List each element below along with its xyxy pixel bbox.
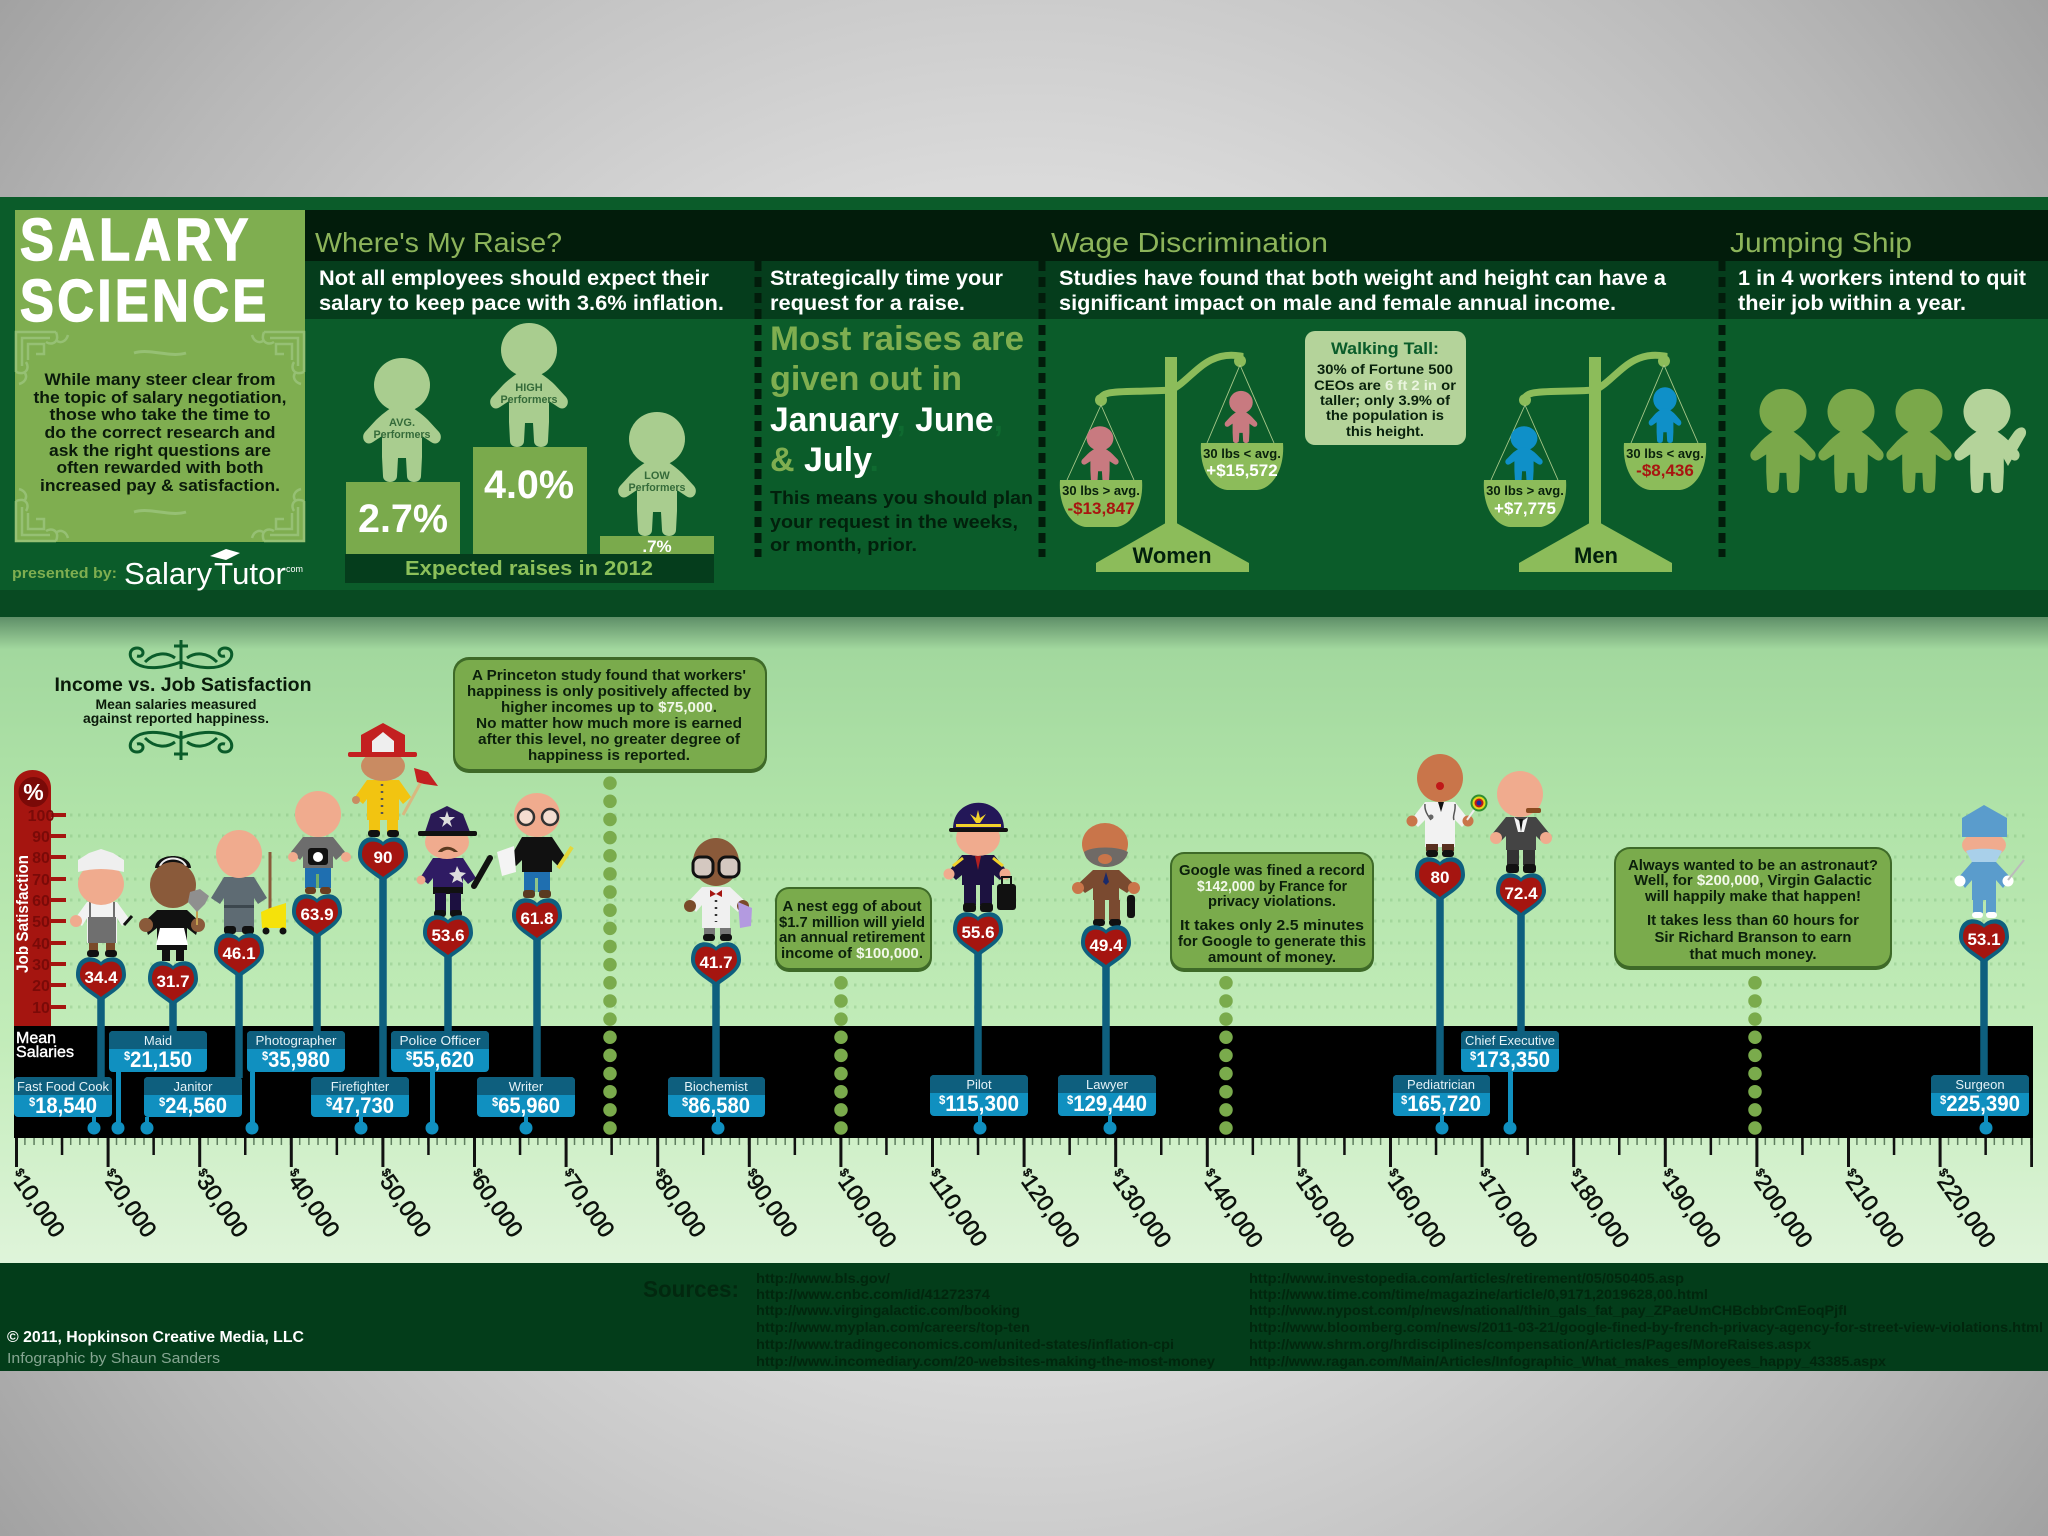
text: jumping intro: 1 in 4 workers intend to quit — [1738, 267, 2026, 290]
character: surgeon — [1954, 805, 2024, 918]
salary position pins — [88, 1072, 1992, 1134]
text: sources: http://www.investopedia.com/articles/retirement/05/050405.asp — [1249, 1270, 1684, 1286]
axis: job satisfaction: 40 — [32, 936, 50, 953]
callout: google fine: Google was fined a record — [1179, 862, 1365, 879]
hearts: satisfaction values: 53.6 — [431, 926, 465, 945]
axis: salary labels: 50,000 — [375, 1169, 437, 1242]
text: sources: http://www.time.com/time/magazine/article/0,9171,2019628,00.html — [1249, 1286, 1708, 1302]
heading: income vs job satisfaction — [54, 640, 312, 760]
callout: nest egg: income of $100,000. — [781, 945, 923, 962]
intro text: ask the right questions are — [49, 442, 271, 460]
text: copyright: © 2011, Hopkinson Creative Media, LLC — [7, 1329, 304, 1346]
axis: salary labels: $ — [1753, 1166, 1768, 1179]
text: raise intro: salary to keep pace with 3.6% inflation. — [319, 292, 724, 315]
hearts: satisfaction values: 55.6 — [961, 923, 995, 942]
hearts: satisfaction values: 61.8 — [520, 909, 554, 928]
callout: nest egg: $1.7 million will yield — [779, 914, 925, 931]
figure: thinner man — [1649, 387, 1681, 443]
axis: salary labels: 10,000 — [9, 1169, 70, 1242]
axis: salary labels: 220,000 — [1932, 1169, 2001, 1252]
axis: salary labels: 190,000 — [1658, 1169, 1727, 1252]
callout: walking tall: taller; only 3.9% of — [1320, 392, 1450, 408]
axis: job satisfaction: % — [23, 779, 44, 805]
tag: pilot: $ — [939, 1093, 946, 1107]
character: writer — [497, 793, 572, 898]
percent values: 2.7% — [358, 497, 448, 541]
chart: men scale — [1484, 355, 1706, 572]
tag: surgeon: $ — [1940, 1093, 1946, 1107]
performer labels: HIGH — [515, 382, 543, 394]
axis: salary labels: $ — [1478, 1166, 1493, 1179]
character: fast food cook — [70, 849, 132, 957]
tag: janitor: Janitor — [173, 1079, 213, 1094]
tag: photographer: Photographer — [256, 1033, 337, 1048]
presented by logo: Tutor — [214, 556, 286, 591]
text: sources: http://www.incomediary.com/20-websites-making-the-most-money — [756, 1353, 1215, 1369]
callout: google fine: privacy violations. — [1208, 893, 1336, 910]
axis: salary labels: 70,000 — [558, 1169, 620, 1242]
callout: walking tall: the population is — [1326, 407, 1444, 423]
callout: google fine: for Google to generate this — [1178, 933, 1366, 950]
axis: job satisfaction: 70 — [32, 872, 50, 889]
callout: princeton study: A Princeton study found that workers' — [472, 667, 746, 684]
tag: lawyer — [1058, 1075, 1156, 1116]
axis: salary labels: 30,000 — [192, 1169, 254, 1242]
pans — [1484, 480, 1566, 527]
heading: wage discrimination: Wage Discrimination — [1051, 227, 1328, 258]
axis: salary labels: 170,000 — [1474, 1169, 1543, 1252]
panel: title block — [15, 206, 305, 542]
axis: salary labels: 120,000 — [1016, 1169, 1085, 1252]
chart: women scale: -$13,847 — [1067, 499, 1135, 518]
icons: four workers — [1750, 389, 2026, 493]
tag: writer — [477, 1077, 575, 1118]
women label: Women — [1132, 543, 1212, 568]
icon: low performer — [618, 412, 696, 536]
tag: pediatrician: Pediatrician — [1407, 1077, 1475, 1092]
text: wage intro: significant impact on male and female annual income. — [1059, 292, 1616, 315]
performer labels: Performers — [628, 482, 686, 494]
tag: firefighter: 47,730 — [332, 1093, 394, 1118]
heading: jumping ship: Jumping Ship — [1730, 227, 1912, 258]
callout: princeton study: higher incomes up to $75,000. — [501, 699, 717, 716]
callout: virgin galactic: will happily make that happen! — [1644, 888, 1861, 905]
text: timing panel: Strategically time your — [770, 267, 1003, 290]
character: janitor — [211, 830, 286, 934]
performer labels: LOW — [644, 470, 670, 482]
heading: income vs job satisfaction: Income vs. Job Satisfaction — [54, 675, 312, 696]
character: chief executive — [1490, 771, 1552, 873]
text: sources: http://www.shrm.org/hrdisciplines/compensation/Articles/Pages/MoreRaises.aspx — [1249, 1336, 1811, 1352]
text: sources: http://www.ragan.com/Main/Articles/Infographic_What_makes_employees_happy_43385.aspx — [1249, 1353, 1886, 1369]
axis: salary labels: $ — [928, 1166, 944, 1179]
axis: job satisfaction: 20 — [32, 978, 50, 995]
tag: maid: 21,150 — [130, 1047, 192, 1072]
axis: salary labels: $ — [745, 1166, 761, 1179]
chart: men scale: +$7,775 — [1494, 499, 1556, 518]
presented by logo — [12, 549, 303, 591]
axis: job satisfaction — [13, 770, 66, 1026]
character: photographer — [288, 791, 351, 894]
pan labels: 30 lbs > avg. — [1486, 483, 1564, 498]
character: pediatrician — [1406, 754, 1488, 857]
axis: salary ticks — [15, 1142, 2033, 1152]
character: lawyer — [1072, 823, 1140, 926]
text: wage intro — [1059, 267, 1666, 315]
axis: salary labels: 140,000 — [1200, 1169, 1269, 1252]
hearts: satisfaction values — [76, 837, 2009, 1006]
axis: salary labels: 20,000 — [100, 1169, 162, 1242]
percent values: .7% — [642, 537, 672, 556]
tag: maid: $ — [124, 1049, 130, 1063]
tag: firefighter: Firefighter — [331, 1079, 390, 1094]
tag: fast food cook: Fast Food Cook — [17, 1079, 109, 1094]
presented by logo: presented by: — [12, 565, 117, 582]
intro text: often rewarded with both — [56, 459, 264, 477]
tag: firefighter: $ — [326, 1095, 332, 1109]
heading: where's my raise: Where's My Raise? — [315, 227, 562, 258]
men label: Men — [1574, 543, 1618, 568]
title — [20, 206, 270, 334]
tag: janitor: $ — [159, 1095, 165, 1109]
hearts: satisfaction values: 41.7 — [699, 953, 733, 972]
callout: google fine: $142,000 by France for — [1197, 878, 1347, 895]
icon: high performer — [490, 323, 568, 447]
text: sources: http://www.bloomberg.com/news/2011-03-21/google-fined-by-french-privacy-agency-for-street-view-violations.html — [1249, 1319, 2043, 1335]
text: sources: http://www.nypost.com/p/news/national/thin_gals_fat_pay_ZPaeUmCHBcbbrCmEoqPjfI — [1249, 1302, 1847, 1318]
tag: writer: $ — [492, 1095, 498, 1109]
separators — [758, 261, 1722, 557]
callout: virgin galactic: It takes less than 60 hours for — [1647, 912, 1859, 929]
axis: salary labels — [5, 1164, 2001, 1252]
callout: nest egg: A nest egg of about — [782, 898, 922, 915]
tag: police officer: $ — [406, 1049, 412, 1063]
callout: nest egg — [775, 887, 932, 972]
axis: salary labels: 200,000 — [1749, 1169, 1818, 1252]
intro text: the topic of salary negotiation, — [34, 389, 286, 407]
text: timing panel: This means you should plan — [770, 488, 1033, 508]
text: wage intro: Studies have found that both weight and height can have a — [1059, 267, 1666, 290]
tag: biochemist: $ — [682, 1095, 688, 1109]
text: timing panel: or month, prior. — [770, 535, 917, 555]
callout: princeton study: after this level, no greater degree of — [478, 731, 741, 748]
text: raise intro — [319, 267, 724, 315]
axis: salary labels: $ — [1844, 1166, 1860, 1179]
pan labels: 30 lbs > avg. — [1062, 483, 1140, 498]
intro text: increased pay & satisfaction. — [40, 477, 280, 495]
axis: salary labels: 130,000 — [1108, 1169, 1177, 1252]
text: timing panel: Most raises are — [770, 320, 1024, 358]
callout: google fine: amount of money. — [1208, 949, 1336, 966]
axis: job satisfaction: 80 — [32, 850, 50, 867]
hearts: satisfaction values: 46.1 — [222, 944, 256, 963]
axis: salary labels: $ — [379, 1166, 394, 1179]
tag: writer: Writer — [509, 1079, 544, 1094]
bars — [346, 447, 714, 554]
tag: chief executive — [1461, 1031, 1559, 1072]
label: mean salaries: Mean — [16, 1030, 56, 1047]
tag: fast food cook — [14, 1077, 112, 1118]
text: sources: http://www.cnbc.com/id/41272374 — [756, 1286, 990, 1302]
callout: google fine — [1170, 852, 1374, 972]
performer labels: AVG. — [389, 417, 415, 429]
text: sources — [643, 1270, 2043, 1369]
tag: lawyer: 129,440 — [1073, 1091, 1147, 1116]
tag: janitor — [144, 1077, 242, 1118]
text: timing panel: your request in the weeks, — [770, 512, 1018, 532]
text: jumping intro — [1738, 267, 2026, 315]
percent values: 4.0% — [484, 463, 574, 507]
axis: job satisfaction: Job Satisfaction — [13, 855, 32, 973]
axis: salary labels: $ — [837, 1166, 852, 1179]
axis: salary labels: $ — [470, 1166, 486, 1179]
grid lines — [70, 815, 2030, 1007]
tag: pilot: Pilot — [966, 1077, 992, 1092]
tag: photographer: $ — [262, 1049, 268, 1063]
tag: pediatrician — [1393, 1075, 1490, 1116]
tag: police officer: Police Officer — [400, 1033, 481, 1048]
axis: job satisfaction: 10 — [32, 1000, 50, 1017]
title: SALARY — [20, 206, 252, 273]
panel: footer — [0, 1263, 2048, 1371]
tag: police officer — [391, 1031, 489, 1072]
text: sources: http://www.myplan.com/careers/top-ten — [756, 1319, 1030, 1335]
chart: men scale: -$8,436 — [1636, 461, 1694, 480]
tag: biochemist: 86,580 — [688, 1093, 750, 1118]
title: SCIENCE — [20, 267, 270, 334]
axis: job satisfaction: 60 — [32, 893, 50, 910]
callout: nest egg: an annual retirement — [779, 929, 925, 946]
axis: salary labels: 150,000 — [1291, 1169, 1360, 1252]
text: timing panel: given out in — [770, 360, 962, 398]
presented by logo: com — [286, 564, 303, 574]
hearts: satisfaction values: 63.9 — [300, 905, 334, 924]
performer labels: Performers — [500, 394, 558, 406]
text: jumping intro: their job within a year. — [1738, 292, 1966, 315]
figure: heavier man — [1505, 426, 1543, 482]
tag: chief executive: $ — [1470, 1049, 1476, 1063]
callout: virgin galactic: Well, for $200,000, Virgin Galactic — [1634, 872, 1872, 889]
tag: chief executive: Chief Executive — [1465, 1033, 1555, 1048]
tag: lawyer: $ — [1067, 1093, 1073, 1107]
intro text: While many steer clear from — [44, 371, 276, 389]
intro text — [34, 371, 286, 495]
callout: google fine: It takes only 2.5 minutes — [1180, 917, 1364, 934]
tag: photographer: 35,980 — [268, 1047, 330, 1072]
label: mean salaries — [16, 1030, 74, 1061]
tag: pilot: 115,300 — [945, 1091, 1019, 1116]
callout: walking tall: Walking Tall: — [1331, 339, 1439, 358]
axis: salary labels: 40,000 — [284, 1169, 345, 1242]
tag: biochemist: Biochemist — [684, 1079, 748, 1094]
text: timing panel: & July. — [770, 441, 879, 479]
tag: writer: 65,960 — [498, 1093, 560, 1118]
axis: salary labels: $ — [195, 1166, 211, 1179]
percent values — [358, 463, 672, 556]
label: mean salaries: Salaries — [16, 1044, 74, 1061]
tag: fast food cook: $ — [29, 1095, 35, 1109]
hearts: satisfaction values: 31.7 — [156, 972, 190, 991]
axis: salary labels: $ — [1936, 1166, 1951, 1179]
text: sources: Sources: — [643, 1276, 739, 1302]
panel: lower chart background — [0, 617, 2048, 1263]
axis: salary labels: $ — [104, 1166, 119, 1179]
tag: maid: Maid — [144, 1033, 172, 1048]
character: pilot — [944, 803, 1016, 912]
callout: princeton study: happiness is only positively affected by — [467, 683, 752, 700]
axis: salary labels: $ — [1569, 1166, 1585, 1179]
axis: job satisfaction: 100 — [28, 808, 54, 825]
stems from hearts to tags — [101, 870, 1984, 1078]
axis: salary labels: $ — [1203, 1166, 1219, 1179]
tag: police officer: 55,620 — [412, 1047, 474, 1072]
callout: princeton study: happiness is reported. — [528, 747, 690, 764]
tag: janitor: 24,560 — [165, 1093, 227, 1118]
icon: avg performer — [363, 358, 441, 482]
performer labels: Performers — [374, 429, 430, 441]
hearts: satisfaction values: 34.4 — [84, 968, 118, 987]
axis: salary labels: 210,000 — [1841, 1169, 1910, 1252]
presented by logo: Salary — [124, 556, 212, 591]
text: copyright — [7, 1329, 304, 1367]
chart: women scale: 30 lbs < avg. — [1203, 446, 1281, 461]
axis: salary labels: $ — [12, 1166, 28, 1179]
text: sources: http://www.bls.gov/ — [756, 1270, 890, 1286]
tag: surgeon: Surgeon — [1955, 1077, 2005, 1092]
tag: pediatrician: 165,720 — [1407, 1091, 1481, 1116]
callout: walking tall: 30% of Fortune 500 — [1317, 361, 1453, 377]
axis: salary labels: 180,000 — [1566, 1169, 1635, 1252]
chart: men scale: 30 lbs < avg. — [1626, 446, 1704, 461]
text: raise intro: Not all employees should expect their — [319, 267, 709, 290]
axis: salary labels: $ — [1020, 1166, 1035, 1179]
performer labels — [374, 382, 686, 494]
hearts: satisfaction values: 72.4 — [1504, 884, 1538, 903]
tag: maid — [109, 1031, 207, 1072]
expected raises caption: Expected raises in 2012 — [405, 558, 653, 580]
callout: princeton study: No matter how much more is earned — [476, 715, 742, 732]
axis: job satisfaction: 90 — [32, 829, 50, 846]
dotted callout connectors — [610, 780, 1755, 1128]
axis: salary labels: $ — [1111, 1166, 1127, 1179]
ornament bottom — [130, 731, 232, 760]
axis: salary labels: 90,000 — [742, 1169, 803, 1242]
tag: photographer — [247, 1031, 345, 1072]
text: sources: http://www.virgingalactic.com/booking — [756, 1302, 1020, 1318]
callout: virgin galactic: Always wanted to be an astronaut? — [1628, 857, 1878, 874]
tag: pediatrician: $ — [1401, 1093, 1407, 1107]
tag: lawyer: Lawyer — [1086, 1077, 1129, 1092]
axis: salary labels: 80,000 — [650, 1169, 712, 1242]
intro text: those who take the time to — [50, 406, 270, 424]
hearts: satisfaction values: 90 — [374, 848, 392, 867]
callout: virgin galactic: Sir Richard Branson to earn — [1654, 929, 1852, 946]
hearts: satisfaction values: 49.4 — [1089, 936, 1123, 955]
axis: job satisfaction: 50 — [32, 914, 50, 931]
axis: salary labels: $ — [1295, 1166, 1310, 1179]
figure: thinner woman — [1225, 391, 1257, 443]
callout: princeton study — [453, 657, 767, 773]
axis: salary labels: $ — [653, 1166, 669, 1179]
callout: walking tall: CEOs are 6 ft 2 in or — [1314, 377, 1457, 393]
tag: surgeon — [1931, 1075, 2029, 1116]
axis: salary labels: 160,000 — [1383, 1169, 1452, 1252]
chart: women scale — [1060, 355, 1283, 572]
axis: salary labels: $ — [287, 1166, 303, 1179]
heading: income vs job satisfaction: Mean salaries measured — [96, 696, 256, 712]
text: timing panel: January, June, — [770, 401, 1003, 439]
text: copyright: Infographic by Shaun Sanders — [7, 1350, 220, 1367]
text: timing panel: request for a raise. — [770, 292, 965, 315]
axis: salary labels: $ — [1386, 1166, 1402, 1179]
character: firefighter — [348, 723, 438, 837]
icon: worker quitting — [1954, 389, 2026, 493]
ornament top — [130, 640, 232, 669]
tag: fast food cook: 18,540 — [35, 1093, 97, 1118]
character: maid — [139, 856, 209, 961]
hearts: satisfaction values: 80 — [1431, 868, 1449, 887]
heading: income vs job satisfaction: against reported happiness. — [83, 710, 269, 726]
callout: virgin galactic — [1614, 847, 1892, 970]
axis: job satisfaction: 30 — [32, 957, 50, 974]
hearts: satisfaction values: 53.1 — [1967, 930, 2001, 949]
axis: salary labels: $ — [562, 1166, 577, 1179]
chart: women scale: +$15,572 — [1206, 461, 1278, 480]
text: timing panel — [770, 267, 1033, 555]
corner ornaments — [16, 332, 304, 541]
callout: walking tall — [1305, 331, 1466, 445]
panel: top band — [0, 197, 2048, 617]
axis: salary labels: $ — [1661, 1166, 1677, 1179]
axis: salary labels: 100,000 — [833, 1169, 902, 1252]
axis: salary labels: 110,000 — [925, 1169, 993, 1251]
callout: walking tall: this height. — [1346, 423, 1424, 439]
text: sources: http://www.tradingeconomics.com/united-states/inflation-cpi — [756, 1336, 1174, 1352]
callout: virgin galactic: that much money. — [1690, 946, 1816, 963]
character: biochemist — [684, 838, 752, 941]
intro text: do the correct research and — [44, 424, 276, 442]
tag: biochemist — [668, 1077, 765, 1118]
pans — [1060, 480, 1142, 527]
axis: salary labels: 60,000 — [467, 1169, 528, 1242]
tag: surgeon: 225,390 — [1946, 1091, 2020, 1116]
chart: expected raises — [345, 323, 714, 583]
tag: pilot — [930, 1075, 1028, 1116]
tag: chief executive: 173,350 — [1476, 1047, 1550, 1072]
expected raises caption — [345, 554, 714, 583]
tag: firefighter — [311, 1077, 409, 1118]
black salary band — [14, 1026, 2033, 1138]
figure: heavier woman — [1081, 426, 1119, 482]
character: police officer — [416, 806, 490, 917]
